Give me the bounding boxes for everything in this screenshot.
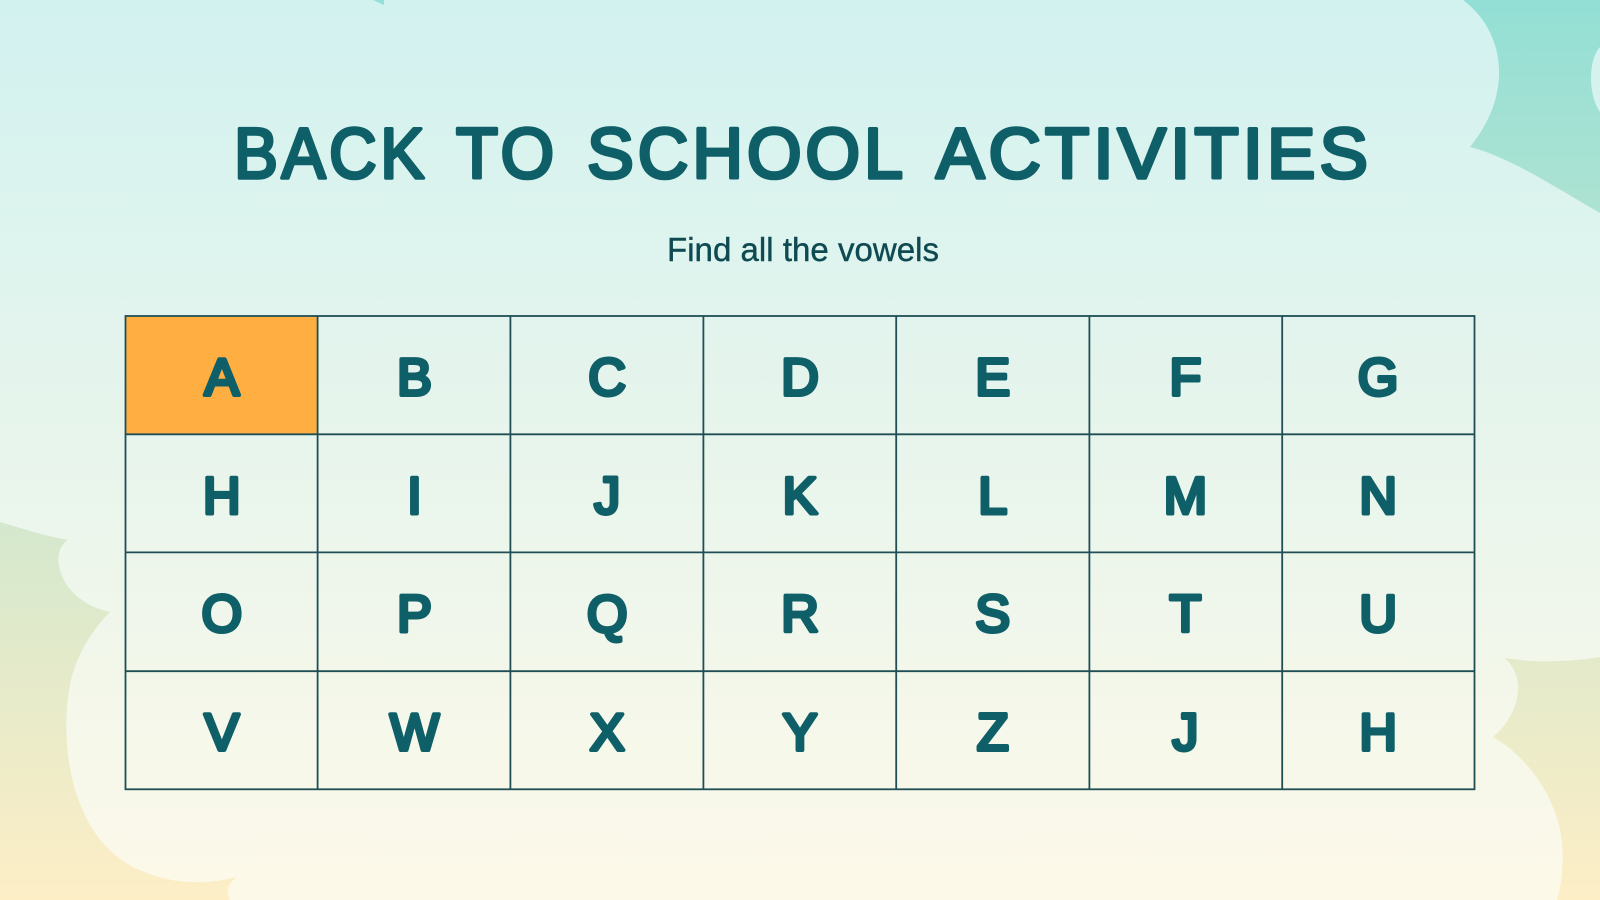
row 4 letters — [204, 704, 1397, 762]
grid lines — [126, 316, 1474, 789]
row 2 letters: L — [978, 467, 1007, 525]
row 1 letters: G — [1358, 349, 1398, 407]
title: SCHOOL — [587, 115, 907, 194]
row 3 letters: P — [397, 586, 432, 644]
letter grid — [126, 316, 1474, 789]
row 2 letters: N — [1359, 467, 1397, 525]
row 1 letters: E — [975, 349, 1010, 407]
row 3 letters: O — [202, 586, 242, 644]
row 2 letters: I — [407, 467, 422, 525]
row 4 letters: X — [590, 704, 625, 762]
row 2 letters: M — [1164, 467, 1207, 525]
row 1 letters: F — [1170, 349, 1201, 407]
row 1 letters: C — [588, 349, 626, 407]
small cloud tip at top — [373, 0, 384, 5]
row 3 letters: R — [781, 586, 819, 644]
row 1 letters: D — [781, 349, 819, 407]
row 4 letters: W — [390, 704, 439, 762]
row 4 letters: Z — [977, 704, 1009, 762]
row 1 letters: B — [397, 349, 432, 407]
title: TO — [456, 115, 558, 194]
row 4 letters: Y — [783, 704, 817, 762]
row 3 letters: T — [1170, 586, 1201, 644]
title: BACK — [234, 115, 428, 194]
row 4 letters: J — [1172, 704, 1198, 762]
row 2 letters — [203, 467, 1397, 525]
title — [234, 115, 1372, 194]
row 3 letters: U — [1359, 586, 1397, 644]
title: ACTIVITIES — [936, 115, 1372, 194]
row 3 letters: Q — [587, 586, 627, 644]
subtitle: Find all the vowels — [667, 231, 939, 268]
row 3 letters — [202, 586, 1397, 644]
row 3 letters: S — [975, 586, 1010, 644]
highlighted cell A — [126, 316, 318, 434]
row 1 letters — [204, 349, 1398, 407]
row 4 letters: H — [1359, 704, 1397, 762]
row 1 letters: A — [204, 349, 239, 407]
row 4 letters: V — [204, 704, 239, 762]
row 2 letters: H — [203, 467, 241, 525]
row 2 letters: J — [594, 467, 620, 525]
row 2 letters: K — [783, 467, 818, 525]
